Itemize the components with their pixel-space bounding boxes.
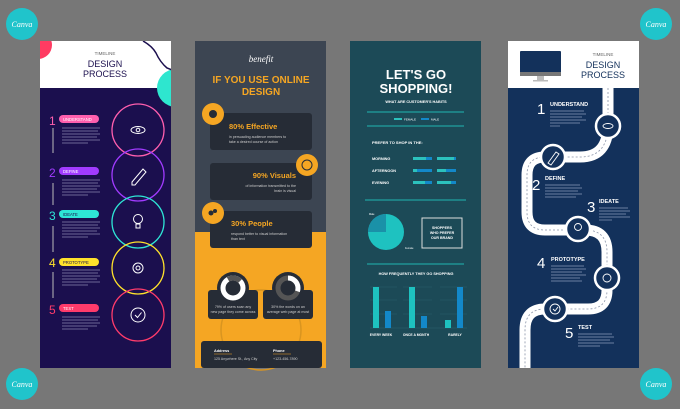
stat card: 30%: 30% the words on an [271, 305, 305, 309]
step 4 prototype [49, 256, 100, 285]
icon: canva logo top-right [640, 8, 672, 40]
panel: design process road timeline [508, 41, 639, 368]
heading: timeline design process: PROCESS [83, 69, 127, 79]
heading: IF YOU USE ONLINE [212, 75, 310, 86]
card: 80% effective [202, 103, 312, 150]
step texts: 2 [532, 177, 540, 194]
step 5 test: TEST [63, 306, 74, 311]
step texts: DEFINE [545, 176, 566, 182]
step 2 define [49, 166, 100, 195]
pie chart: Female [405, 247, 414, 250]
heading: timeline design process [83, 51, 127, 79]
step texts [532, 101, 619, 342]
heading: LET'S GO [386, 67, 446, 82]
step 1 understand: 1 [49, 114, 56, 128]
step 5 test [49, 303, 100, 329]
heading: PROCESS [581, 70, 625, 80]
callout box: shoppers who prefer our brand: OUR BRAND [431, 236, 453, 240]
icon: canva logo top-right: Canva [646, 20, 666, 29]
footer: address and phone [201, 341, 322, 368]
bar chart: how frequently: HOW FREQUENTLY THEY GO SHOPPING [379, 272, 453, 276]
step texts: UNDERSTAND [550, 102, 588, 108]
step 3 ideate: 3 [49, 209, 56, 223]
footer: address and phone: +123-456-7890 [273, 357, 297, 361]
legend: MALE [431, 118, 439, 122]
card: 90% visuals: of information transmitted to the [245, 184, 296, 188]
heading: DESIGN [242, 87, 280, 98]
icon: canva logo top-left: Canva [12, 20, 32, 29]
road icon circles [541, 114, 620, 321]
heading: SHOPPING! [380, 81, 452, 96]
panel: let's go shopping [350, 41, 481, 368]
heading: WHAT ARE CUSTOMER'S HABITS [385, 100, 447, 104]
heading: timeline design process: DESIGN [88, 59, 122, 69]
step texts: PROTOTYPE [551, 257, 585, 263]
stat card: 79% [208, 272, 258, 319]
step 2 define: DEFINE [63, 169, 79, 174]
footer: address and phone: Phone [273, 349, 285, 353]
bar rows: prefer to shop [372, 140, 456, 185]
step 2 define: 2 [49, 166, 56, 180]
footer: address and phone: 125 Anywhere St., Any City [214, 357, 258, 361]
card: 30% people: 30% People [231, 219, 273, 228]
bar rows: prefer to shop: PREFER TO SHOP IN THE: [372, 140, 423, 145]
stat card: 30%: average web page at most [267, 310, 309, 314]
step texts: 3 [587, 199, 595, 216]
card: 90% visuals: 90% Visuals [253, 171, 296, 180]
card: 80% effective: take a desired course of action [229, 140, 278, 144]
step 4 prototype: 4 [49, 256, 56, 270]
panel: design process timeline (circles) [40, 41, 171, 368]
icon: canva logo bottom-left: Canva [12, 380, 32, 389]
bar chart: how frequently: EVERY WEEK [370, 333, 393, 337]
card: 30% people: respond better to visual information [231, 232, 287, 236]
icon circles [112, 104, 164, 341]
step texts: 4 [537, 255, 545, 272]
heading: TIMELINE [593, 52, 613, 57]
callout box: shoppers who prefer our brand [422, 218, 462, 248]
stat card: 79%: 79% of users scan any [215, 305, 251, 309]
card: 90% visuals: brain is visual [274, 189, 296, 193]
stat card: 79%: new page they come across [211, 310, 256, 314]
heading: timeline design process: TIMELINE [95, 51, 115, 56]
step 3 ideate: IDEATE [63, 212, 78, 217]
step 5 test: 5 [49, 303, 56, 317]
bar rows: prefer to shop: EVENING [372, 181, 389, 185]
callout box: shoppers who prefer our brand: WHO PREFER [430, 231, 455, 235]
icon: canva logo top-left [6, 8, 38, 40]
bar rows: prefer to shop: MORNING [372, 157, 390, 161]
heading: benefit [249, 54, 274, 64]
icon: canva logo bottom-right [640, 368, 672, 400]
step 1 understand: UNDERSTAND [63, 117, 92, 122]
bar chart: how frequently: ONCE A MONTH [403, 333, 430, 337]
stat card: 30% [263, 272, 313, 319]
bar chart: how frequently: RARELY [448, 333, 463, 337]
icon: canva logo bottom-right: Canva [646, 380, 666, 389]
callout box: shoppers who prefer our brand: SHOPPERS [432, 226, 453, 230]
heading [212, 54, 310, 98]
card: 80% effective: 80% Effective [229, 122, 277, 131]
card: 90% visuals [210, 154, 318, 200]
icon: canva logo bottom-left [6, 368, 38, 400]
heading [380, 67, 452, 104]
heading: DESIGN [586, 60, 620, 70]
legend [394, 118, 439, 122]
legend: FEMALE [404, 118, 416, 122]
step 3 ideate [49, 209, 100, 237]
step 1 understand [49, 114, 100, 143]
card: 80% effective: in persuading audience members to [229, 135, 286, 139]
footer: address and phone: Address [214, 349, 229, 353]
step texts: 5 [565, 325, 573, 342]
heading [581, 52, 625, 80]
pie chart: Male [369, 213, 375, 216]
step 4 prototype: PROTOTYPE [63, 260, 89, 265]
card: 30% people [202, 202, 312, 248]
pie chart [368, 213, 414, 250]
step texts: TEST [578, 325, 593, 331]
step texts: IDEATE [599, 199, 619, 205]
road [525, 88, 608, 368]
icon: monitor [520, 51, 561, 82]
panel: benefit if you use online design [195, 41, 326, 370]
bar rows: prefer to shop: AFTERNOON [372, 169, 396, 173]
card: 30% people: than text [231, 237, 245, 241]
bar chart: how frequently [370, 272, 467, 337]
step texts: 1 [537, 101, 545, 118]
